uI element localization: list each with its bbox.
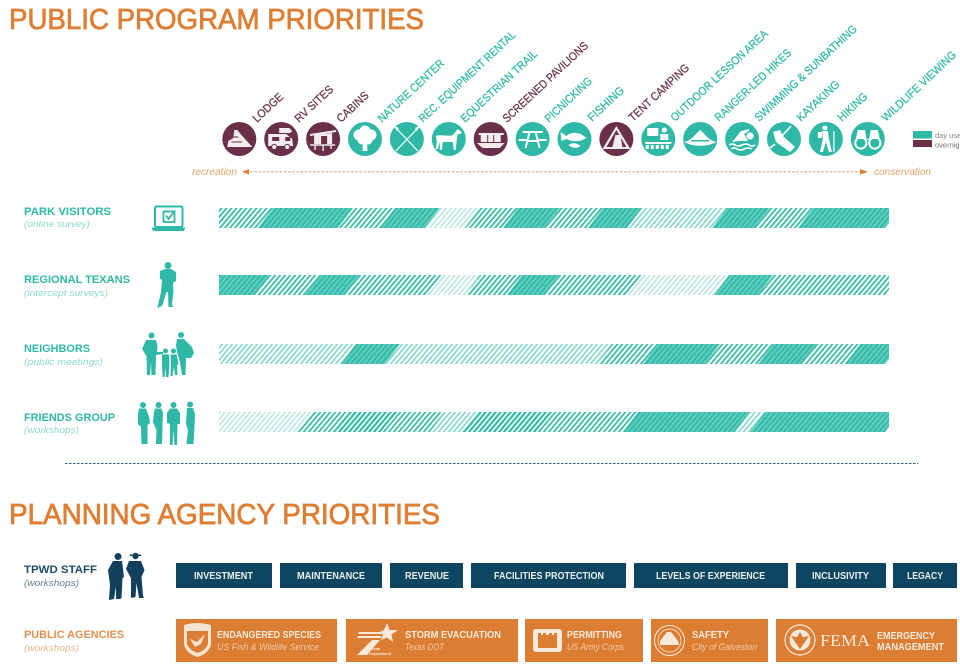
icon: texas dot star bbox=[357, 623, 398, 656]
agency: storm evacuation: STORM EVACUATION bbox=[405, 630, 501, 641]
row: public agencies: PUBLIC AGENCIES bbox=[24, 629, 124, 641]
agency: permitting: PERMITTING bbox=[567, 630, 622, 641]
icon: rv bbox=[264, 122, 298, 156]
amenity labels: PICNICKING bbox=[543, 75, 595, 125]
icon: paddles bbox=[390, 122, 424, 156]
row: neighbors: NEIGHBORS bbox=[24, 343, 90, 355]
row: regional texans: (intercept surveys) bbox=[24, 288, 108, 298]
staff priority boxes: REVENUE bbox=[405, 571, 449, 582]
row: neighbors: (public meetings) bbox=[24, 357, 103, 367]
amenity labels: HIKING bbox=[836, 91, 870, 124]
icon: picnic table bbox=[516, 122, 550, 156]
agency: fema emergency management: FEMA bbox=[820, 631, 871, 650]
icon: binoculars bbox=[851, 122, 885, 156]
icon: horse bbox=[432, 122, 466, 156]
row: friends group: FRIENDS GROUP bbox=[24, 412, 115, 424]
icon: laptop bbox=[152, 206, 185, 231]
row: tpwd staff bbox=[24, 553, 957, 600]
stacked bar: friends group bbox=[204, 412, 900, 432]
agency: endangered species: ENDANGERED SPECIES bbox=[217, 630, 321, 641]
icon: group of four people bbox=[138, 402, 195, 445]
icon: texas dot star: Texas bbox=[369, 646, 381, 651]
icon: city of galveston seal bbox=[654, 626, 684, 656]
icon: hiker bbox=[809, 122, 843, 156]
title: planning agency priorities: PLANNING AGENCY PRIORITIES bbox=[9, 499, 440, 531]
icon: texas dot star: Department bbox=[369, 651, 392, 656]
icon: screened pavilion bbox=[474, 122, 508, 156]
amenity labels: SWIMMING & SUNBATHING bbox=[753, 23, 860, 124]
staff priority boxes: INCLUSIVITY bbox=[812, 571, 869, 582]
amenity labels: REC. EQUIPMENT RENTAL bbox=[417, 29, 519, 125]
recreation to conservation axis: recreation bbox=[192, 167, 237, 178]
amenity labels: RANGER-LED HIKES bbox=[713, 47, 794, 124]
amenity labels: OUTDOOR LESSON AREA bbox=[669, 28, 771, 124]
staff priority boxes: FACILITIES PROTECTION bbox=[494, 571, 604, 582]
row: regional texans: REGIONAL TEXANS bbox=[24, 274, 130, 286]
icon: fish bbox=[558, 122, 592, 156]
amenity labels: CABINS bbox=[335, 90, 372, 125]
stacked bar: regional texans bbox=[204, 275, 900, 295]
stacked bar: park visitors bbox=[204, 208, 900, 228]
icon: swimmer bbox=[725, 122, 759, 156]
amenity labels: RV SITES bbox=[293, 83, 336, 125]
row: park visitors bbox=[24, 206, 900, 231]
agency: permitting bbox=[525, 619, 643, 662]
agency: permitting: US Army Corps bbox=[567, 642, 624, 652]
agency: endangered species bbox=[176, 619, 337, 662]
amenity labels: TENT CAMPING bbox=[627, 62, 692, 124]
icon: army corps castle bbox=[533, 629, 562, 652]
staff priority boxes: INVESTMENT bbox=[194, 571, 253, 582]
recreation to conservation axis: conservation bbox=[874, 167, 931, 178]
row: public agencies: (workshops) bbox=[24, 643, 79, 653]
row: friends group: (workshops) bbox=[24, 425, 79, 435]
row: tpwd staff: (workshops) bbox=[24, 578, 79, 588]
icon: fema seal bbox=[785, 625, 815, 655]
agency: safety: SAFETY bbox=[692, 630, 729, 641]
stacked bar: neighbors bbox=[204, 344, 900, 364]
agency: storm evacuation bbox=[346, 619, 518, 662]
recreation to conservation axis bbox=[192, 167, 931, 178]
agency: fema emergency management: MANAGEMENT bbox=[877, 642, 944, 653]
icon: fish and wildlife shield bbox=[184, 623, 211, 657]
icon: tree bbox=[348, 122, 382, 156]
row: regional texans bbox=[24, 262, 900, 308]
staff priority boxes: LEGACY bbox=[907, 571, 943, 582]
amenity labels: LODGE bbox=[251, 91, 286, 125]
amenity icons row bbox=[222, 122, 885, 156]
amenity labels: NATURE CENTER bbox=[376, 58, 447, 125]
icon: kayak bbox=[767, 122, 801, 156]
legend bbox=[913, 131, 960, 150]
amenity labels: EQUESTRIAN TRAIL bbox=[459, 48, 541, 125]
amenity labels: SCREENED PAVILIONS bbox=[501, 40, 591, 125]
agency: storm evacuation: Texas DOT bbox=[405, 642, 445, 652]
icon: family silhouette bbox=[142, 332, 194, 377]
staff priority boxes bbox=[176, 563, 957, 588]
amenity labels: FISHING bbox=[586, 85, 627, 124]
agency: safety: City of Galveston bbox=[692, 642, 757, 652]
agency: safety bbox=[651, 619, 768, 662]
icon: outdoor lesson bbox=[641, 122, 675, 156]
row: neighbors bbox=[24, 332, 900, 377]
amenity labels: KAYAKING bbox=[795, 79, 843, 124]
agency: fema emergency management: EMERGENCY bbox=[877, 631, 935, 642]
title: public program priorities: PUBLIC PROGRAM PRIORITIES bbox=[9, 4, 424, 36]
agency: endangered species: US Fish & Wildlife Service bbox=[217, 642, 319, 652]
row: tpwd staff: TPWD STAFF bbox=[24, 564, 97, 576]
agency: fema emergency management bbox=[776, 619, 957, 662]
staff priority boxes: LEVELS OF EXPERIENCE bbox=[656, 571, 765, 582]
icon: tent bbox=[599, 122, 633, 156]
icon: lodge bbox=[222, 122, 256, 156]
row: public agencies bbox=[24, 619, 957, 662]
row: friends group bbox=[24, 402, 900, 445]
icon: cabin bbox=[306, 122, 340, 156]
icon: two staff silhouettes bbox=[108, 553, 144, 600]
icon: ranger hat bbox=[683, 122, 717, 156]
icon: standing person bbox=[157, 262, 176, 308]
row: park visitors: (online survey) bbox=[24, 219, 90, 229]
amenity labels bbox=[251, 23, 959, 125]
staff priority boxes: MAINTENANCE bbox=[297, 571, 365, 582]
row: park visitors: PARK VISITORS bbox=[24, 206, 111, 218]
